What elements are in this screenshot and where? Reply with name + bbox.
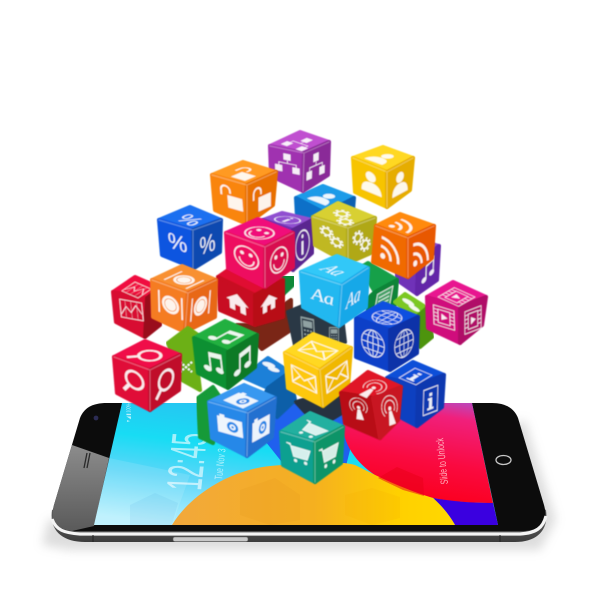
screen pale hexagon [130, 493, 178, 525]
screen status bar: ▾ ◢ ▮ 100% [125, 403, 133, 422]
cube: teal cart [281, 413, 343, 482]
phone camera [94, 416, 98, 420]
cube: dark red clapper [237, 300, 291, 349]
phone screen [94, 403, 498, 525]
cube: dark calculator [288, 303, 345, 350]
screen faint hexagons [378, 467, 424, 496]
cube: green document [360, 263, 397, 320]
cube: purple back right [397, 240, 439, 294]
cube: blue globe [356, 303, 418, 370]
screen slide to unlock: Slide to Unlock [434, 437, 450, 485]
cube: lime back [168, 328, 205, 390]
soft phone shadow [42, 420, 556, 550]
screen date: Tue Nov 3 [212, 448, 228, 480]
cube: purple network [270, 132, 329, 191]
cube: red chart [113, 277, 160, 337]
cube: green behind camera [198, 387, 222, 443]
cube: yellow-green gears [313, 203, 375, 263]
cube: blue cloud [243, 358, 295, 417]
phone white edge highlight [52, 516, 546, 534]
cube: yellow mail [285, 334, 351, 406]
screen blue band [235, 403, 350, 470]
phone speaker [84, 453, 90, 468]
cube: orange plate [152, 266, 216, 332]
screen purple corner [433, 498, 498, 525]
phone volume button [173, 537, 248, 542]
cube: red antenna [341, 372, 401, 438]
cube: yellow contacts [353, 147, 413, 207]
cube: blue info [387, 362, 444, 426]
phone silver frame [52, 500, 546, 542]
cube: orange lock [212, 162, 276, 224]
cube: pink film [427, 282, 486, 343]
cube: purple info [263, 213, 312, 270]
phone black face [53, 403, 546, 531]
cube: lime chat [395, 294, 432, 347]
cube: green back [280, 277, 293, 297]
screen pale facet [94, 458, 190, 525]
cube: blue contacts back [296, 186, 354, 235]
screen orange yellow circle [172, 462, 455, 525]
cube: cyan typography [301, 256, 368, 326]
screen red shape [343, 403, 493, 503]
cube: blue camera [209, 385, 275, 456]
phone home button [496, 456, 511, 464]
screen clock: 12:45 [157, 432, 219, 491]
cube: pink smiley [226, 219, 293, 287]
cube: red magnifier [114, 341, 180, 410]
screen cyan background [94, 403, 498, 525]
cube: green music [194, 321, 257, 388]
cube: orange rss [373, 214, 434, 277]
cube: red house [218, 270, 283, 325]
phone frame seams [93, 535, 500, 542]
phone [52, 403, 546, 542]
phone gray lower left bezel [53, 445, 109, 531]
cube: blue percent [159, 207, 221, 268]
cube: dark behind mail [296, 385, 352, 420]
